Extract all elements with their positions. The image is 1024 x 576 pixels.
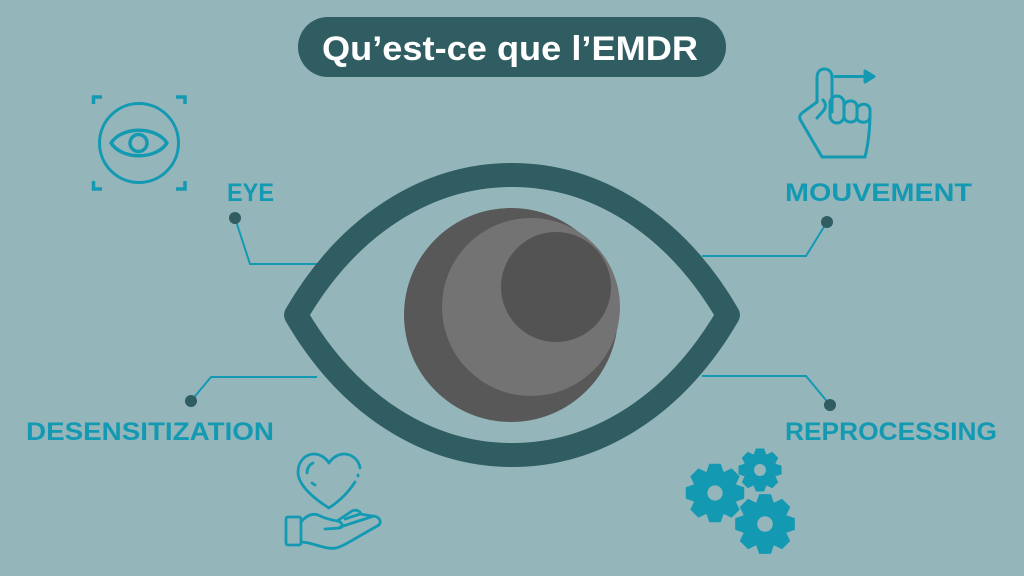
label: mouvement: MOUVEMENT: [785, 179, 972, 207]
central eye: [296, 175, 728, 455]
connector: eye: [235, 218, 318, 264]
title: Qu’est-ce que l’EMDR: [322, 30, 698, 68]
title: [298, 17, 726, 77]
gear: bottom: [736, 495, 794, 553]
connector dot: desensitization: [185, 395, 197, 407]
connector dot: mouvement: [821, 216, 833, 228]
connector: desensitization: [191, 377, 317, 401]
pupil: [404, 208, 620, 422]
connector dot: reprocessing: [824, 399, 836, 411]
connector: mouvement: [702, 222, 827, 256]
label: reprocessing: REPROCESSING: [785, 418, 997, 446]
icon: heart over open hand: [286, 454, 380, 548]
eye outline: [296, 175, 728, 455]
gear: left: [686, 464, 744, 522]
icon: eye in focus frame: [94, 97, 185, 189]
label: eye: EYE: [227, 179, 274, 207]
connector: reprocessing: [702, 376, 830, 405]
connector dot: eye: [229, 212, 241, 224]
label: desensitization: DESENSITIZATION: [26, 418, 274, 446]
icon: pointing hand with arrow: [800, 69, 874, 157]
icon: gears: [686, 449, 794, 553]
gear: top: [739, 449, 781, 491]
